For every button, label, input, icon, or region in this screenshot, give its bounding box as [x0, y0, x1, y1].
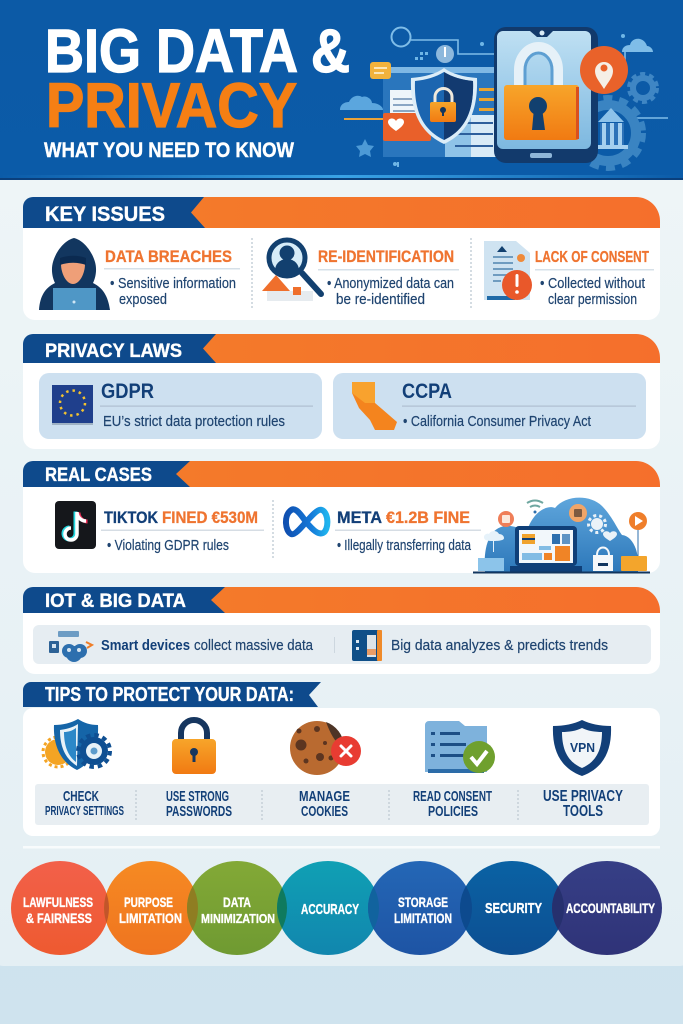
item: TikTok fine — [101, 508, 264, 554]
tip: use privacy tools — [543, 720, 624, 820]
icon: TikTok — [55, 501, 96, 549]
band: tip labels — [35, 784, 649, 825]
sticky note — [370, 62, 391, 79]
item: lack of consent — [535, 249, 654, 308]
icon: hacker — [39, 238, 110, 310]
item: TikTok fine: • Violating GDPR rules — [107, 537, 229, 554]
circle: accountability — [552, 861, 662, 955]
card: CCPA: • California Consumer Privacy Act — [403, 413, 592, 430]
icon: smart devices — [49, 631, 92, 662]
circle: data minimization — [187, 861, 287, 955]
tip: use strong passwords: PASSWORDS — [166, 803, 232, 820]
circle: lawfulness and fairness — [11, 861, 109, 955]
band: IoT facts: Big data analyzes & predicts trends — [391, 637, 608, 654]
item: lack of consent: • Collected without — [540, 275, 646, 292]
tip: use strong passwords — [166, 720, 232, 820]
back document — [383, 67, 497, 157]
tip: use strong passwords: USE STRONG — [166, 788, 229, 805]
section: real cases — [23, 461, 660, 574]
icon: analytics chart — [352, 630, 382, 661]
band: IoT facts — [33, 625, 651, 664]
illustration: connected devices cloud — [473, 498, 650, 574]
tip: manage cookies — [290, 721, 361, 820]
item: data breaches: DATA BREACHES — [105, 247, 232, 266]
item: re-identification: be re-identified — [336, 291, 425, 308]
header bar: key issues — [23, 197, 660, 228]
bank icon — [598, 108, 624, 122]
title: PRIVACY — [46, 71, 297, 141]
tip: use privacy tools: USE PRIVACY — [543, 788, 624, 805]
item: re-identification: • Anonymized data can — [327, 275, 454, 292]
circle labels — [23, 894, 655, 926]
band: IoT facts: Smart devices — [101, 637, 190, 654]
icon: California map — [352, 382, 397, 430]
item: Meta fine — [335, 508, 481, 554]
circle labels: LIMITATION — [119, 910, 182, 926]
item: Meta fine: • Illegally transferring data — [337, 537, 472, 554]
header banner — [0, 0, 683, 180]
panel: privacy laws body — [23, 350, 660, 449]
icon: EU flag — [52, 385, 93, 425]
panel: tips body — [23, 708, 660, 836]
tip: manage cookies: COOKIES — [301, 803, 348, 820]
circle labels: & FAIRNESS — [26, 910, 92, 926]
card: CCPA — [333, 373, 646, 439]
circle labels: SECURITY — [485, 901, 542, 917]
panel: real cases body — [23, 475, 660, 573]
circle: security — [460, 861, 564, 955]
card: GDPR: GDPR — [101, 380, 154, 403]
item: Meta fine: META — [337, 508, 382, 527]
divider — [272, 500, 274, 560]
circle labels: MINIMIZATION — [201, 911, 275, 926]
phone — [494, 27, 598, 163]
title — [44, 17, 350, 162]
title: WHAT YOU NEED TO KNOW — [44, 139, 294, 162]
section: key issues — [23, 197, 660, 320]
header bar: key issues: KEY ISSUES — [45, 203, 165, 226]
divider — [252, 238, 471, 310]
circle labels: STORAGE — [398, 894, 448, 910]
band: IoT facts: collect massive data — [194, 637, 314, 654]
dial — [436, 45, 454, 63]
circle: purpose limitation — [104, 861, 198, 955]
clipboard — [390, 90, 420, 122]
item: data breaches: exposed — [119, 291, 167, 308]
circle labels: ACCURACY — [301, 902, 359, 918]
panel: IoT body — [23, 600, 660, 674]
tip: read consent policies: POLICIES — [428, 803, 478, 820]
header bar: privacy laws: PRIVACY LAWS — [45, 341, 182, 362]
icon: Meta — [286, 509, 327, 534]
tip: use privacy tools: TOOLS — [563, 803, 603, 820]
item: TikTok fine: FINED €530M — [162, 508, 258, 527]
large gear — [580, 105, 636, 161]
tip: manage cookies: MANAGE — [299, 788, 350, 805]
network lines — [344, 28, 668, 119]
circle labels: PURPOSE — [124, 894, 173, 910]
circle labels: DATA — [223, 894, 251, 910]
item: data breaches — [104, 247, 240, 308]
divider — [23, 846, 660, 848]
overlaps — [104, 886, 564, 930]
circle labels: LIMITATION — [394, 910, 452, 926]
item: data breaches: • Sensitive information — [110, 275, 236, 292]
divider — [136, 790, 518, 820]
circle: accuracy — [277, 861, 379, 955]
item: lack of consent: clear permission — [548, 291, 637, 308]
card: GDPR: EU’s strict data protection rules — [103, 413, 285, 430]
header bar: real cases: REAL CASES — [45, 465, 152, 486]
card: CCPA: CCPA — [402, 380, 452, 403]
left cloud — [340, 96, 383, 110]
tip: check privacy settings: PRIVACY SETTINGS — [45, 804, 124, 818]
circle: storage limitation — [368, 861, 472, 955]
main content panel — [0, 170, 683, 966]
shield — [411, 68, 477, 144]
item: re-identification — [318, 247, 459, 308]
item: Meta fine: €1.2B FINE — [386, 508, 470, 527]
header illustration: security collage — [340, 27, 668, 168]
tip: check privacy settings: CHECK — [63, 788, 99, 805]
icon: magnifier over house — [262, 240, 321, 301]
card: GDPR — [39, 373, 322, 439]
big padlock — [519, 47, 558, 86]
tip: use privacy tools: VPN — [570, 740, 595, 755]
circle labels: LAWFULNESS — [23, 894, 93, 910]
title: BIG DATA & — [45, 17, 350, 85]
header bar: IoT — [23, 587, 660, 613]
chart: GDPR principles chain — [11, 861, 662, 955]
item: TikTok fine: TIKTOK — [104, 508, 159, 527]
panel: key issues body — [23, 215, 660, 320]
right small gear — [633, 78, 653, 98]
tip: read consent policies: READ CONSENT — [413, 788, 492, 805]
header bar: IoT: IOT & BIG DATA — [45, 591, 186, 612]
section: privacy laws — [23, 334, 660, 449]
right cloud — [622, 39, 653, 52]
section: IoT and big data — [23, 587, 660, 674]
heart card — [383, 113, 431, 141]
tip: read consent policies — [413, 721, 495, 820]
dots — [393, 34, 625, 167]
tip: check privacy settings — [43, 719, 124, 818]
section: tips — [23, 682, 660, 836]
header ribbon: tips: TIPS TO PROTECT YOUR DATA: — [45, 684, 294, 706]
icon: document with alert — [484, 241, 532, 300]
header bar: real cases — [23, 461, 660, 487]
location pin badge — [580, 46, 628, 94]
header bar: privacy laws — [23, 334, 660, 363]
star — [356, 139, 374, 157]
item: re-identification: RE-IDENTIFICATION — [318, 247, 454, 266]
